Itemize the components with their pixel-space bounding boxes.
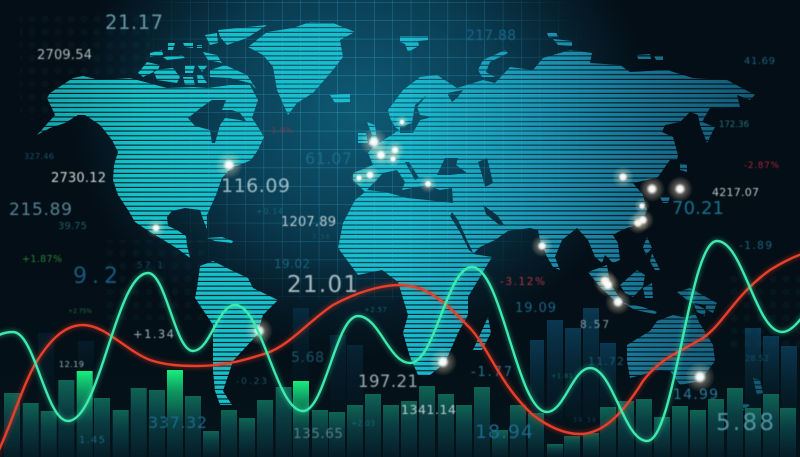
numeric ticker labels: 116.09 [221, 175, 290, 197]
numeric ticker labels: 8.57 [580, 319, 609, 331]
numeric ticker labels: 9.2 [73, 264, 118, 289]
numeric ticker labels: 4217.07 [712, 186, 759, 199]
numeric ticker labels: 1341.14 [401, 402, 456, 417]
numeric ticker labels: 19.09 [515, 301, 556, 316]
numeric ticker labels: 215.89 [9, 200, 72, 220]
numeric ticker labels: 2730.12 [51, 171, 106, 186]
numeric ticker labels: 337.32 [148, 413, 207, 432]
numeric ticker labels: 7.56 [312, 233, 331, 241]
numeric ticker labels: 28.52 [745, 354, 769, 363]
numeric ticker labels: +1.81 [551, 372, 573, 380]
numeric ticker labels: 19.02 [274, 257, 310, 271]
numeric ticker labels: -1.89 [739, 240, 772, 252]
numeric ticker labels: -1.77 [471, 365, 512, 380]
numeric ticker labels: +2.75% [68, 308, 92, 315]
numeric ticker labels: 18.94 [475, 421, 533, 443]
numeric ticker labels: +1.34 [133, 327, 174, 341]
numeric ticker labels: 5.88 [716, 410, 774, 436]
numeric ticker labels: 11.72 [588, 355, 624, 368]
red trend line [0, 253, 800, 457]
numeric ticker labels: -1.9% [268, 126, 293, 135]
numeric ticker labels: 197.21 [358, 372, 418, 391]
numeric ticker labels: 70.21 [672, 198, 724, 219]
numeric ticker labels: +2.03 [351, 419, 375, 428]
numeric ticker labels: +2.57 [364, 306, 387, 314]
numeric ticker labels: 5.68 [291, 350, 324, 366]
foreground bar chart [4, 370, 796, 457]
numeric ticker labels: 41.69 [744, 56, 775, 67]
numeric ticker labels: 21.01 [287, 272, 358, 298]
grid overlay [120, 0, 600, 300]
numeric ticker labels: 2709.54 [37, 48, 92, 63]
numeric ticker labels: 1207.89 [281, 215, 336, 230]
green oscillating line [0, 241, 800, 441]
numeric ticker labels: 30.30 [573, 417, 596, 424]
background blue bars [38, 308, 797, 420]
world map made of horizontal stripes [37, 22, 763, 410]
numeric ticker labels: 327.46 [24, 152, 54, 161]
numeric ticker labels: 57.1 [137, 261, 163, 271]
numeric ticker labels: -2.87% [744, 161, 779, 171]
numeric ticker labels: 1.45 [79, 435, 105, 446]
numeric ticker labels: 21.17 [105, 11, 163, 34]
numeric ticker labels: +1.87% [22, 254, 62, 265]
numeric ticker labels: 14.99 [673, 387, 718, 403]
numeric ticker labels: 12.19 [59, 360, 84, 369]
numeric ticker labels: 217.88 [466, 28, 516, 44]
numeric ticker labels: -0.23 [236, 377, 267, 387]
numeric ticker labels: -3.12% [500, 276, 545, 288]
halftone dot texture [20, 10, 800, 350]
numeric ticker labels: +0.14 [256, 207, 283, 216]
numeric ticker labels: 172.36 [719, 120, 749, 130]
numeric ticker labels: 135.65 [293, 426, 343, 442]
numeric ticker labels: 61.07 [305, 149, 352, 168]
numeric ticker labels: 39.75 [58, 221, 87, 232]
glowing city lights [146, 115, 715, 392]
